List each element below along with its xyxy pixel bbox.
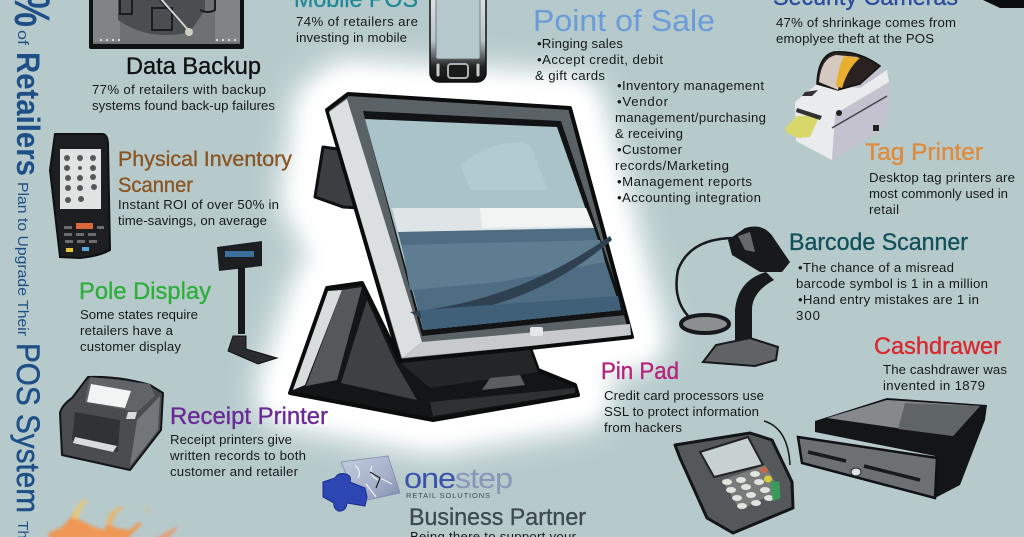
heading: receipt printer: Receipt Printer (170, 403, 328, 430)
heading: physical inventory scanner: Scanner (118, 173, 193, 197)
list: sales features (535, 36, 663, 83)
heading: tag printer: Tag Printer (865, 139, 983, 166)
icon: mobile phone (430, 0, 486, 82)
list: management features: •Vendor (617, 94, 669, 109)
side headline: percent of retailers: Retailers (10, 52, 46, 176)
icon: security camera (983, 0, 1024, 8)
icon: puzzle logo (323, 456, 400, 511)
heading: point of sale: Point of Sale (533, 3, 715, 38)
icon: pole display (217, 241, 277, 364)
icon: terminal hinge (315, 147, 360, 208)
text: receipt printer: written records to both (169, 448, 306, 463)
text: physical inventory scanner: Instant ROI of over 50% in (118, 197, 279, 212)
icon: terminal frame (327, 94, 632, 361)
side headline: percent of retailers: POS System (10, 343, 46, 513)
side headline: percent of retailers: Plan to Upgrade Their (14, 182, 31, 336)
heading: physical inventory scanner: Physical Inventory (118, 147, 292, 171)
text: cashdrawer (883, 362, 1007, 393)
side headline: percent of retailers (4, 0, 60, 537)
icon: tag printer (785, 52, 890, 160)
icon: handheld inventory scanner (50, 134, 110, 258)
icon: terminal screen border (363, 111, 626, 336)
text: barcode scanner: 300 (796, 308, 820, 323)
text: pole display: Some states require (80, 307, 198, 322)
text: barcode scanner: •Hand entry mistakes are 1 in (798, 292, 979, 307)
icon: pos terminal (290, 94, 632, 420)
heading: physical inventory scanner (118, 147, 292, 197)
list: management features: •Inventory management (617, 78, 764, 93)
list: management features: •Customer (617, 142, 683, 157)
icon: barcode scanner (676, 226, 790, 366)
text: barcode scanner: •The chance of a misread (798, 260, 954, 275)
text: pin pad: SSL to protect information (604, 404, 759, 419)
text: mobile pos: 74% of retailers are (296, 14, 418, 29)
icon: terminal stand (290, 283, 578, 420)
side headline: percent of retailers: of (14, 30, 31, 46)
logo: onestep retail solutions: RETAIL SOLUTIONS (406, 491, 490, 500)
text: receipt printer: customer and retailer (170, 464, 299, 479)
text: pole display: customer display (80, 339, 181, 354)
text: receipt printer: Receipt printers give (170, 432, 292, 447)
list: management features: management/purchasing (615, 110, 766, 125)
heading: cashdrawer: Cashdrawer (874, 333, 1001, 360)
text: mobile pos (296, 14, 418, 45)
heading: data backup: Data Backup (126, 53, 261, 80)
logo: onestep retail solutions: onestep (404, 463, 512, 495)
list: sales features: & gift cards (535, 68, 605, 83)
icon: terminal silver edge (329, 99, 422, 358)
icon: vault door (89, 0, 244, 49)
heading: barcode scanner: Barcode Scanner (789, 229, 968, 256)
list: management features: records/Marketing (615, 158, 729, 173)
list: management features (615, 78, 766, 205)
icon: cash drawer (798, 398, 987, 498)
heading: pole display: Pole Display (79, 278, 211, 305)
text: data backup (92, 82, 275, 113)
text: cashdrawer: The cashdrawer was (883, 362, 1007, 377)
text: security cameras (776, 15, 956, 46)
icon: receipt printer (60, 377, 163, 470)
text: data backup: systems found back-up failures (92, 98, 275, 113)
text: tag printer: most commonly used in (869, 186, 1008, 201)
text: tag printer: retail (869, 202, 899, 217)
list: management features: & receiving (615, 126, 683, 141)
list: sales features: •Accept credit, debit (537, 52, 663, 67)
text: barcode scanner: barcode symbol is 1 in a million (796, 276, 988, 291)
text: pin pad: from hackers (604, 420, 682, 435)
list: management features: •Accounting integration (617, 190, 761, 205)
heading: pin pad: Pin Pad (601, 358, 679, 385)
icon: terminal bottom strip (402, 324, 631, 358)
text: pole display (80, 307, 198, 354)
text: pole display: retailers have a (80, 323, 174, 338)
text: barcode scanner (796, 260, 988, 323)
text: physical inventory scanner (118, 197, 279, 228)
text: physical inventory scanner: time-savings, on average (118, 213, 267, 228)
text: receipt printer (169, 432, 306, 479)
monitor glow (290, 94, 632, 420)
icon: pin pad (675, 421, 793, 533)
icon: terminal logo (530, 327, 543, 336)
text: security cameras: 47% of shrinkage comes from (776, 15, 956, 30)
text: pin pad: Credit card processors use (604, 388, 764, 403)
text: pin pad (604, 388, 764, 435)
text: tag printer: Desktop tag printers are (869, 170, 1015, 185)
icon: terminal screen (365, 119, 621, 330)
list: sales features: •Ringing sales (537, 36, 623, 51)
text: mobile pos: investing in mobile (296, 30, 407, 45)
text: tag printer (869, 170, 1015, 217)
list: management features: •Management reports (617, 174, 752, 189)
text: data backup: 77% of retailers with backup (92, 82, 266, 97)
heading: business partner: Business Partner (409, 504, 586, 531)
text: cashdrawer: invented in 1879 (883, 378, 985, 393)
icon: orange splash (48, 499, 177, 537)
text: security cameras: emoplyee theft at the POS (776, 31, 934, 46)
